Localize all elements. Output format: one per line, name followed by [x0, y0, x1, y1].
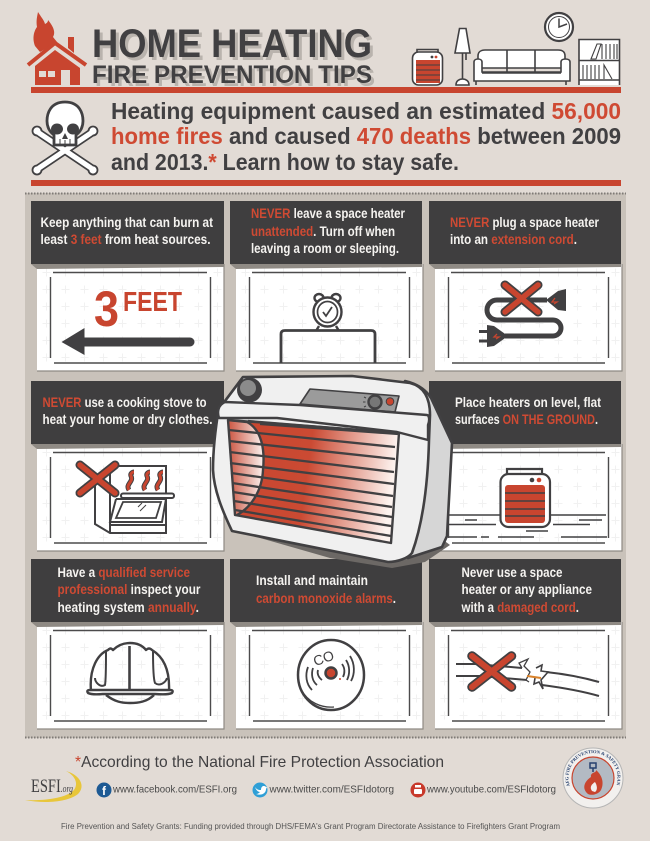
social: facebook: f: [102, 784, 107, 798]
tip text: NEVER leave a space heater: [251, 205, 405, 221]
panel: carbon monoxide alarms: [230, 559, 423, 729]
heater grille: [228, 420, 399, 543]
tip text: [42, 394, 212, 427]
heater knob: [237, 378, 262, 402]
illustration: large space heater: [213, 376, 452, 568]
icon: hard hat: [87, 643, 173, 703]
tip text: leaving a room or sleeping.: [251, 240, 399, 256]
tip text: [256, 572, 396, 606]
tip text: [40, 214, 213, 247]
icon: house on fire: [28, 12, 86, 85]
icon: alarm clock on table: [281, 294, 375, 363]
tip text: Place heaters on level, flat: [455, 394, 601, 410]
tip text: [461, 564, 592, 615]
tip text: with a damaged cord.: [461, 599, 579, 615]
icon: crossed-out stove: [80, 465, 174, 533]
tip text: NEVER plug a space heater: [450, 214, 599, 230]
title: [92, 22, 372, 89]
social: twitter: [252, 782, 394, 798]
icon: small heater: [412, 50, 442, 85]
divider: lower red bar: [31, 180, 621, 186]
icon: CO alarm: [298, 640, 364, 710]
tip text: carbon monoxide alarms.: [256, 590, 396, 606]
intro text: [111, 98, 621, 175]
panel: keep 3 feet away: [31, 201, 224, 371]
social: youtube: www.youtube.com/ESFIdotorg: [426, 784, 556, 796]
intro line 1: Heating equipment caused an estimated 56,000: [111, 98, 621, 124]
tip text: into an extension cord.: [450, 231, 577, 247]
icon: wall clock: [545, 13, 573, 41]
tip text: [58, 564, 201, 615]
panel: no extension cord: [429, 201, 622, 371]
heater control plate: [300, 389, 399, 412]
tip text: heat your home or dry clothes.: [42, 411, 212, 427]
icon: CO alarm: CO: [311, 647, 336, 669]
tip text: heater or any appliance: [462, 581, 592, 597]
tip text: least 3 feet from heat sources.: [40, 231, 210, 247]
icon: skull and crossbones: [32, 102, 98, 174]
title line: fire prevention tips: FIRE PREVENTION TIPS: [92, 61, 372, 89]
panel: qualified service professional: [31, 559, 224, 729]
divider: top red bar: [31, 87, 621, 93]
icon: 3 feet arrow: FEET: [123, 286, 182, 317]
panel: no cooking stove: [31, 381, 224, 551]
footnote: *According to the National Fire Protection Association: [75, 754, 444, 771]
panel: damaged cord: [429, 559, 622, 729]
intro line 2: home fires and caused 470 deaths between 2009: [111, 123, 621, 149]
tip text: [251, 205, 405, 256]
icon: floor lamp: [455, 28, 470, 85]
tip text: [455, 394, 601, 427]
title line: home heating: HOME HEATING: [92, 22, 372, 66]
tip text: Have a qualified service: [58, 564, 190, 580]
tip text: surfaces ON THE GROUND.: [455, 411, 598, 427]
tip text: NEVER use a cooking stove to: [42, 394, 206, 410]
panel: tips background: [25, 193, 626, 738]
icon: 3 feet arrow: 3: [94, 281, 119, 337]
tip text: unattended. Turn off when: [251, 223, 395, 239]
icon: bookshelf: [579, 40, 620, 85]
icon: crossed-out extension cord: [479, 285, 566, 347]
tip text: heating system annually.: [58, 599, 199, 615]
icon: damaged cord: [456, 656, 599, 696]
social: facebook: [96, 782, 237, 798]
icon: sofa: [474, 50, 570, 85]
icon: 3 feet arrow: [62, 281, 194, 355]
panel: level flat surfaces: [429, 381, 622, 551]
social: twitter: www.twitter.com/ESFIdotorg: [269, 784, 394, 796]
logo: ESFI: [25, 771, 82, 802]
tip text: Keep anything that can burn at: [40, 214, 213, 230]
funding credit: Fire Prevention and Safety Grants: Funding provided through DHS/FEMA's Grant Program Directorate Assistance to Firefighters Grant Program: [61, 822, 560, 831]
tip text: Never use a space: [462, 564, 563, 580]
tip text: Install and maintain: [256, 572, 368, 588]
social: facebook: www.facebook.com/ESFI.org: [112, 784, 237, 796]
social: youtube: [410, 782, 556, 798]
tip text: professional inspect your: [58, 581, 201, 597]
tip text: [450, 214, 599, 247]
icon: heater on floor: [449, 469, 607, 537]
seal: AFG fire prevention and safety grants: AFG FIRE PREVENTION & SAFETY GRANTS: [565, 750, 620, 786]
logo: ESFI: ESFI.org: [31, 776, 73, 797]
panel: never leave unattended: [230, 201, 423, 371]
intro line 3: and 2013.* Learn how to stay safe.: [111, 149, 459, 175]
